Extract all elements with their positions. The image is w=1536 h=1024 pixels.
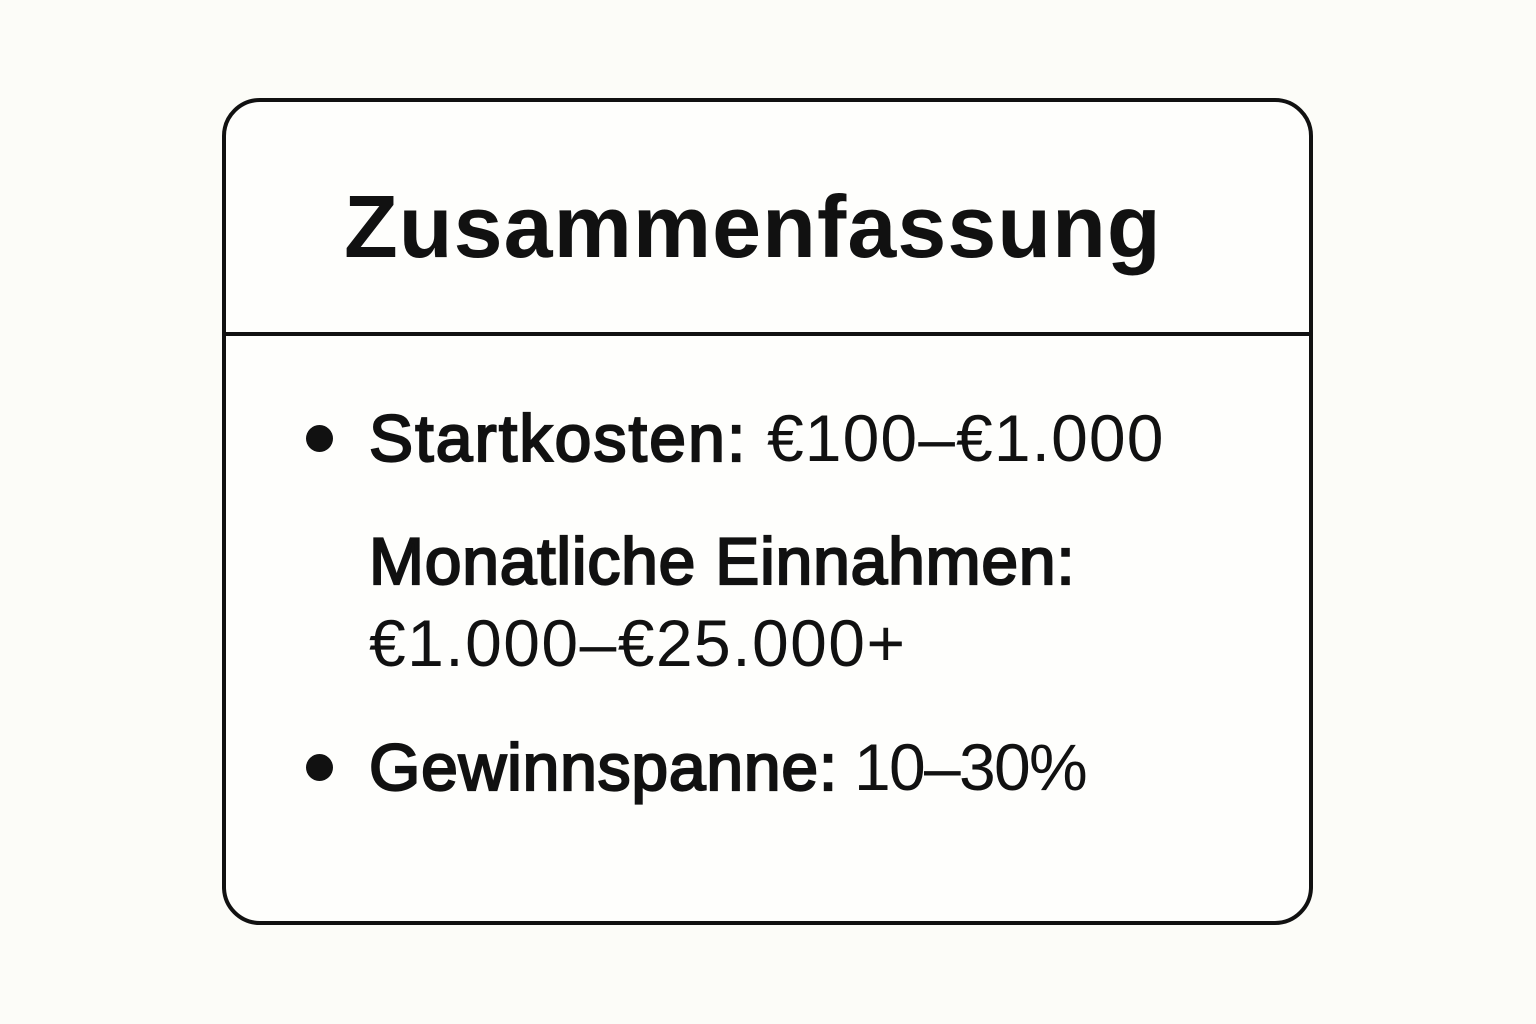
value: Startkosten: €100–€1.000 [767,401,1164,475]
panel: summary card [222,98,1313,925]
divider [225,332,1310,336]
value: Gewinnspanne: 10–30% [854,730,1086,804]
bullet: Gewinnspanne [306,730,1086,805]
heading: Zusammenfassung [344,177,1162,276]
label: Startkosten: Startkosten: [369,401,748,475]
label: Gewinnspanne: Gewinnspanne: [369,730,838,804]
bullet dot [306,754,333,781]
card outline [222,98,1313,925]
text: Monatliche Einnahmen [369,524,1076,680]
label: Monatliche Einnahmen: [369,524,1076,598]
bullet dot [306,425,333,452]
value: €1.000–€25.000+ [369,606,906,680]
bullet: Startkosten [306,401,1164,475]
